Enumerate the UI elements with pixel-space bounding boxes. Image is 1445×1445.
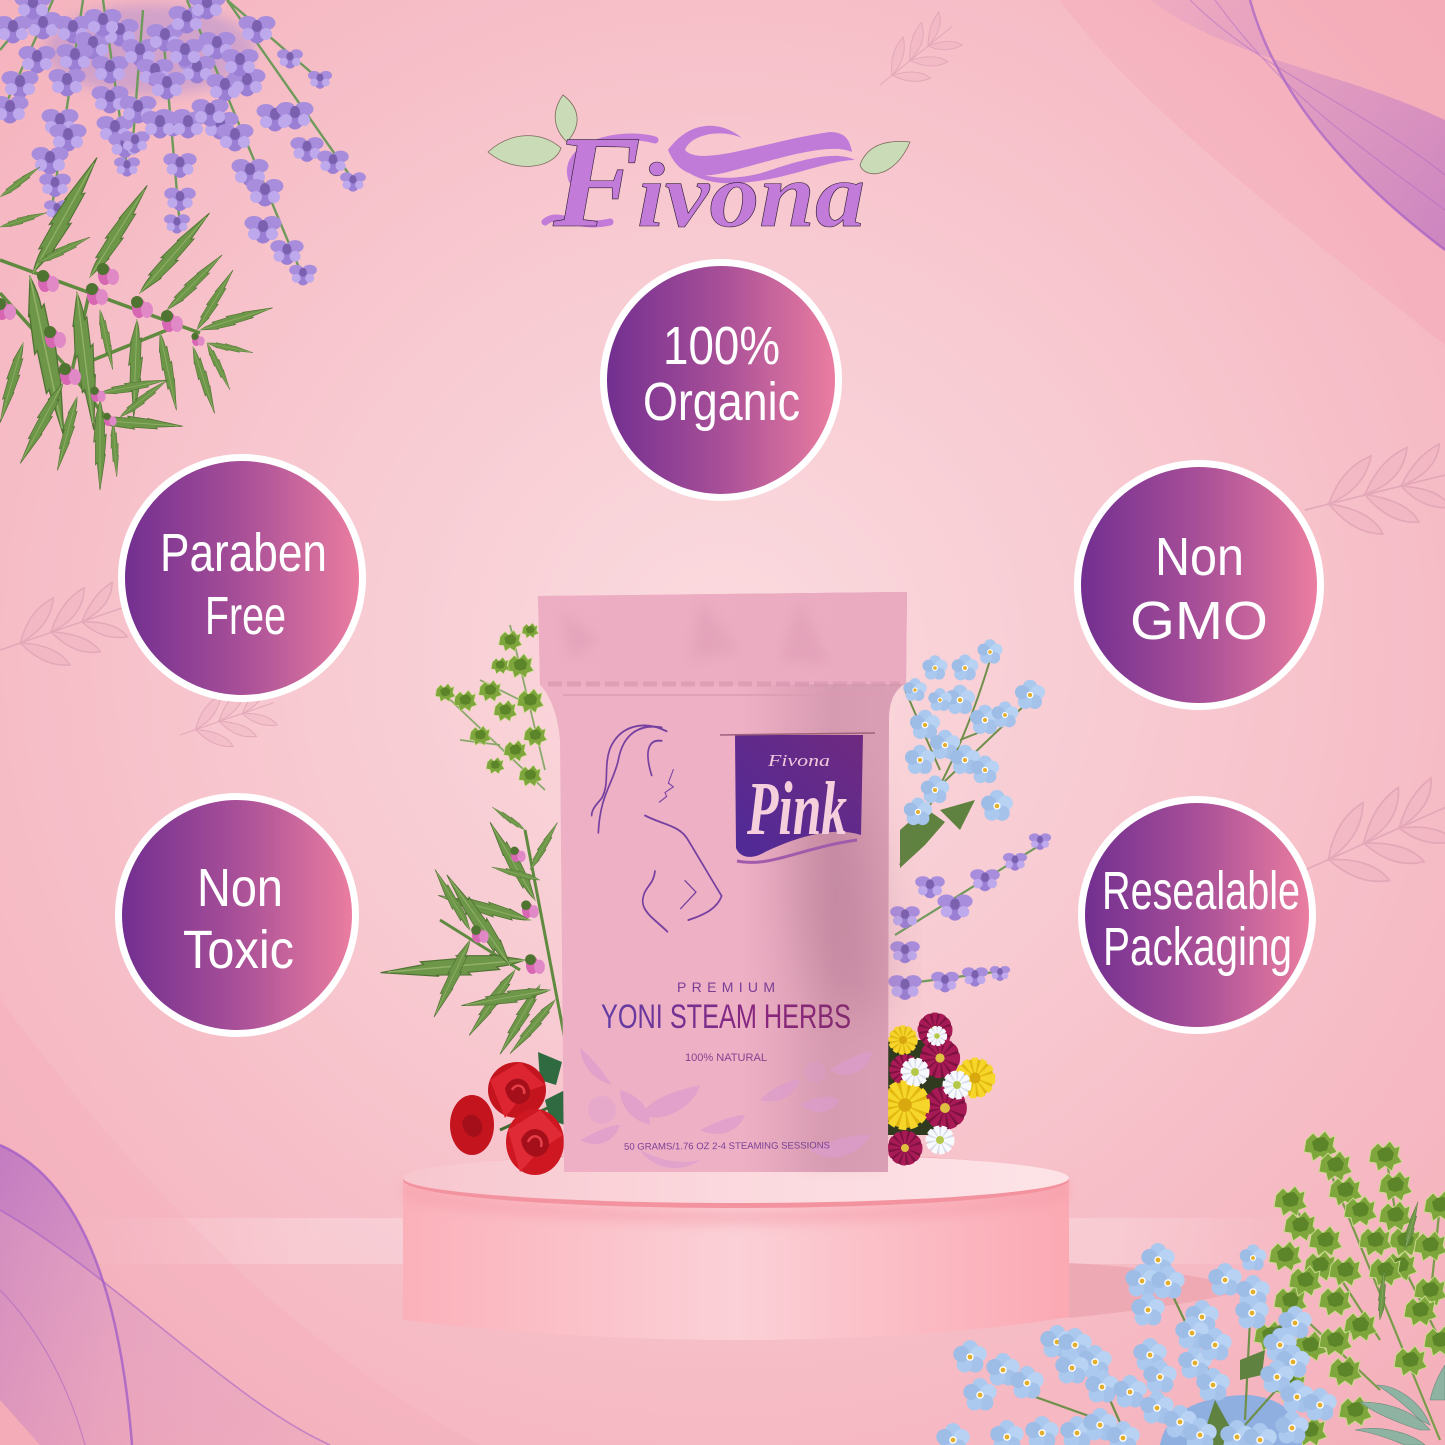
logo leaves: [488, 95, 910, 174]
lower herb: [380, 805, 565, 1057]
pouch floral pattern: [580, 1048, 872, 1168]
herb: top left: [0, 153, 274, 490]
pouch top seal: [538, 592, 907, 685]
logo: Fivona: [488, 95, 910, 255]
pouch line art: woman silhouette: [592, 726, 722, 932]
herbs behind pouch: right: [882, 639, 1051, 1165]
podium: [403, 1152, 1069, 1340]
floor band: [60, 1218, 1300, 1318]
veil: bottom left: [0, 1000, 480, 1445]
pouch label: Fivona Pink: Fivona: [767, 751, 830, 770]
badge: Non GMO: Non: [1155, 527, 1244, 587]
pouch label: Fivona Pink: [720, 733, 875, 862]
badge: Non Toxic: Non: [197, 858, 283, 918]
ghost leaf sprigs: [0, 9, 1445, 895]
roses: [450, 1052, 565, 1175]
badge: Non Toxic: Toxic: [183, 920, 294, 980]
green sprigs: [1254, 1131, 1445, 1445]
badge: Paraben Free: Paraben: [160, 523, 327, 583]
badge: Resealable Packaging: [1078, 796, 1316, 1034]
pouch text: weight: 50 GRAMS/1.76 OZ 2-4 STEAMING SESSIONS: [624, 1140, 830, 1153]
badge: Resealable Packaging: Resealable: [1102, 861, 1300, 921]
pouch text: 100% natural: 100% NATURAL: [685, 1052, 767, 1064]
forget-me-nots: [936, 1243, 1337, 1445]
green fluffy sprig: [435, 623, 547, 790]
blue forget-me-nots: [900, 639, 1045, 868]
veil: top right: [1060, 0, 1445, 345]
herbs behind pouch: left: [380, 623, 565, 1175]
logo wordmark rest: ivona: [637, 144, 865, 246]
badge: Non GMO: GMO: [1130, 591, 1268, 651]
herbs: bottom right: [936, 1131, 1445, 1445]
logo initial: F: [552, 108, 641, 255]
badge: Non Toxic: [115, 793, 359, 1037]
badge: 100% Organic: 100%: [663, 316, 780, 376]
lavender: top left: [0, 0, 366, 285]
badge: 100% Organic: Organic: [643, 372, 800, 432]
badge: Non GMO: [1074, 460, 1324, 710]
pouch text: yoni steam herbs: YONI STEAM HERBS: [601, 998, 851, 1036]
logo swoosh: [668, 126, 855, 183]
badge: Resealable Packaging: Packaging: [1103, 917, 1292, 977]
badge: Paraben Free: [118, 454, 366, 702]
pouch folds and shadow: [548, 600, 900, 1170]
badge: 100% Organic: [600, 259, 842, 501]
purple lavender: [888, 833, 1051, 1000]
badge: Paraben Free: Free: [205, 586, 286, 646]
pouch: [538, 592, 907, 1172]
logo flourish: [545, 137, 655, 224]
mixed daisies: [882, 1013, 994, 1165]
pouch text: premium: PREMIUM: [677, 979, 775, 995]
pouch body: [538, 592, 907, 1172]
pouch label: Fivona Pink: Pink: [746, 767, 847, 851]
